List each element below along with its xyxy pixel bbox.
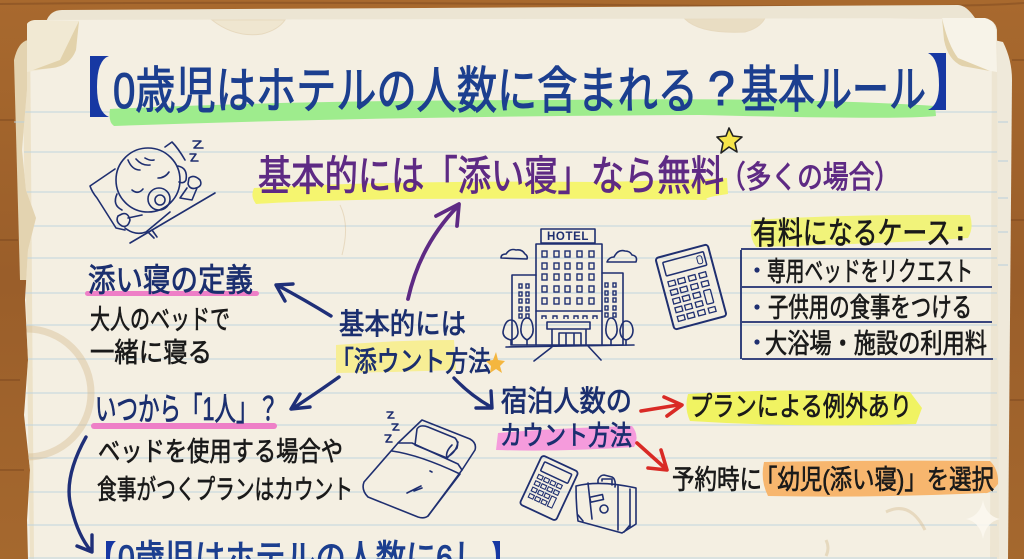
title: 基本ルール <box>741 62 926 118</box>
arrow: to subtitle <box>408 204 459 299</box>
section: when counted as one person: 食事がつくプランはカウント <box>97 475 353 505</box>
heading: paid cases: 有料になるケース <box>753 216 951 251</box>
table: paid cases list <box>741 249 993 359</box>
title highlight <box>110 99 936 126</box>
section: when counted as one person <box>91 391 353 505</box>
section: co-sleeping definition: 一緒に寝る <box>90 338 212 368</box>
arrow: to definition <box>276 284 331 316</box>
arrow: to counting <box>454 378 492 408</box>
arrow: to plan exceptions <box>641 397 682 416</box>
icon: hotel: HOTEL <box>547 231 589 243</box>
icon: star <box>717 128 742 153</box>
callout: reservation note: 予約時に <box>672 465 762 495</box>
center node: counting method: 基本的には <box>339 308 466 341</box>
subtitle: 基本的には「添い寝」なら無料 <box>258 153 724 199</box>
callout: plan exceptions: プランによる例外あり <box>690 392 912 422</box>
section: when counted as one person: いつから「1人」？ <box>95 391 279 427</box>
center node: counting method <box>331 308 505 377</box>
icon: hotel <box>501 229 636 361</box>
icon: small calculator <box>519 455 579 521</box>
subtitle: （多くの場合） <box>720 160 900 195</box>
arrow: to reservation note <box>637 443 667 470</box>
title: ? <box>708 63 735 116</box>
section: stay count method: 宿泊人数の <box>501 385 632 418</box>
heading highlight: paid cases <box>751 215 972 247</box>
icon: suitcase <box>576 475 636 533</box>
section: when counted as one person: ベッドを使用する場合や <box>98 437 343 467</box>
section: co-sleeping definition: 大人のベッドで <box>90 305 230 335</box>
icon: bed <box>363 412 475 518</box>
section: co-sleeping definition: 添い寝の定義 <box>88 262 253 298</box>
folded corner: top left <box>27 20 79 72</box>
subtitle highlight <box>252 178 728 204</box>
icon: sleeping baby <box>90 141 215 243</box>
section: stay count method <box>496 385 637 451</box>
icon: calculator <box>655 244 727 330</box>
ruled lines <box>24 112 997 558</box>
folded corner: top right <box>942 18 997 72</box>
heading: paid cases: : <box>956 216 965 246</box>
section: stay count method: カウント方法 <box>500 421 632 451</box>
section: co-sleeping definition <box>85 262 259 368</box>
sparkle watermark <box>966 500 1000 539</box>
title: 0歳児はホテルの人数に含まれる <box>113 63 698 119</box>
arrow: curved down to bottom heading <box>69 437 92 552</box>
center node: counting method: 「添ウント方法 <box>331 346 491 377</box>
callout: reservation note <box>672 461 998 497</box>
arrow: to when counted <box>291 377 339 409</box>
